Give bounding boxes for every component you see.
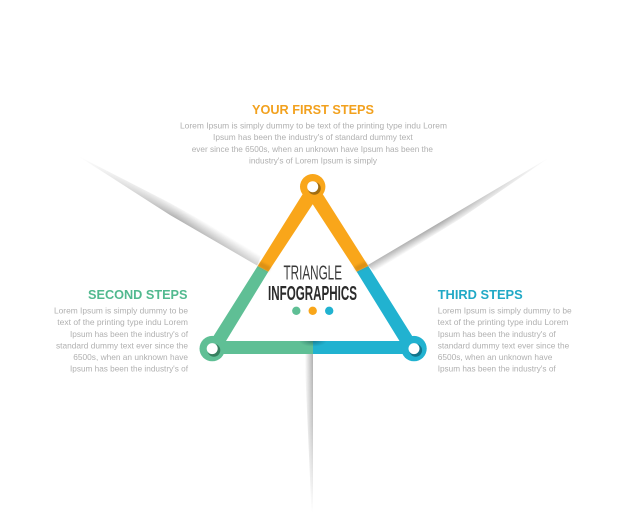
shadow along bottom band centre bbox=[299, 341, 327, 347]
shadow on orange band at left join bbox=[258, 262, 271, 272]
text block: first steps: ever since the 6500s, when an unknown have Ipsum has been the bbox=[192, 144, 433, 154]
shadow: upper right fold bbox=[368, 164, 539, 271]
text block: second steps: standard dummy text ever since the bbox=[56, 340, 188, 350]
dots bbox=[292, 307, 333, 315]
heading: your first steps: YOUR FIRST STEPS bbox=[252, 102, 374, 117]
band: blue bbox=[313, 266, 420, 354]
text block: second steps: Ipsum has been the industry's of bbox=[70, 364, 189, 374]
node: top bbox=[300, 174, 325, 199]
text block: second steps: 6500s, when an unknown have bbox=[73, 352, 188, 362]
shadow: bottom fold bbox=[306, 354, 313, 500]
text block: first steps: Ipsum has been the industry's of standard dummy text bbox=[213, 132, 413, 142]
heading: second steps: SECOND STEPS bbox=[88, 287, 188, 302]
text block: second steps: Lorem Ipsum is simply dummy to be bbox=[54, 306, 188, 316]
text block: first steps: Lorem Ipsum is simply dummy to be text of the printing type indu Lorem bbox=[180, 121, 447, 131]
text block: second steps: Ipsum has been the industry's of bbox=[70, 329, 189, 339]
text block: third steps: text of the printing type indu Lorem bbox=[438, 317, 568, 327]
triangle diagram bbox=[200, 174, 427, 361]
title: triangle infographics: INFOGRAPHICS bbox=[268, 283, 357, 305]
band: green bbox=[206, 266, 313, 354]
title: triangle infographics: TRIANGLE bbox=[284, 262, 342, 284]
node: left bbox=[200, 336, 225, 361]
text block: third steps bbox=[438, 306, 572, 374]
text block: first steps bbox=[180, 121, 447, 165]
node: right bbox=[401, 336, 427, 361]
text block: third steps: 6500s, when an unknown have bbox=[438, 352, 553, 362]
text block: third steps: Ipsum has been the industry's of bbox=[438, 329, 556, 339]
text block: third steps: Lorem Ipsum is simply dummy to be bbox=[438, 306, 572, 316]
band: orange bbox=[258, 192, 368, 272]
text block: third steps: Ipsum has been the industry's of bbox=[438, 364, 556, 374]
text block: first steps: industry's of Lorem Ipsum is simply bbox=[249, 155, 378, 165]
shadow: upper left fold bbox=[92, 164, 260, 266]
heading: third steps: THIRD STEPS bbox=[438, 287, 523, 302]
shadow on orange band at right join bbox=[354, 262, 368, 272]
text block: second steps: text of the printing type indu Lorem bbox=[57, 317, 188, 327]
title: triangle infographics bbox=[268, 262, 357, 305]
text block: third steps: standard dummy text ever since the bbox=[438, 340, 570, 350]
text block: second steps bbox=[54, 306, 189, 374]
